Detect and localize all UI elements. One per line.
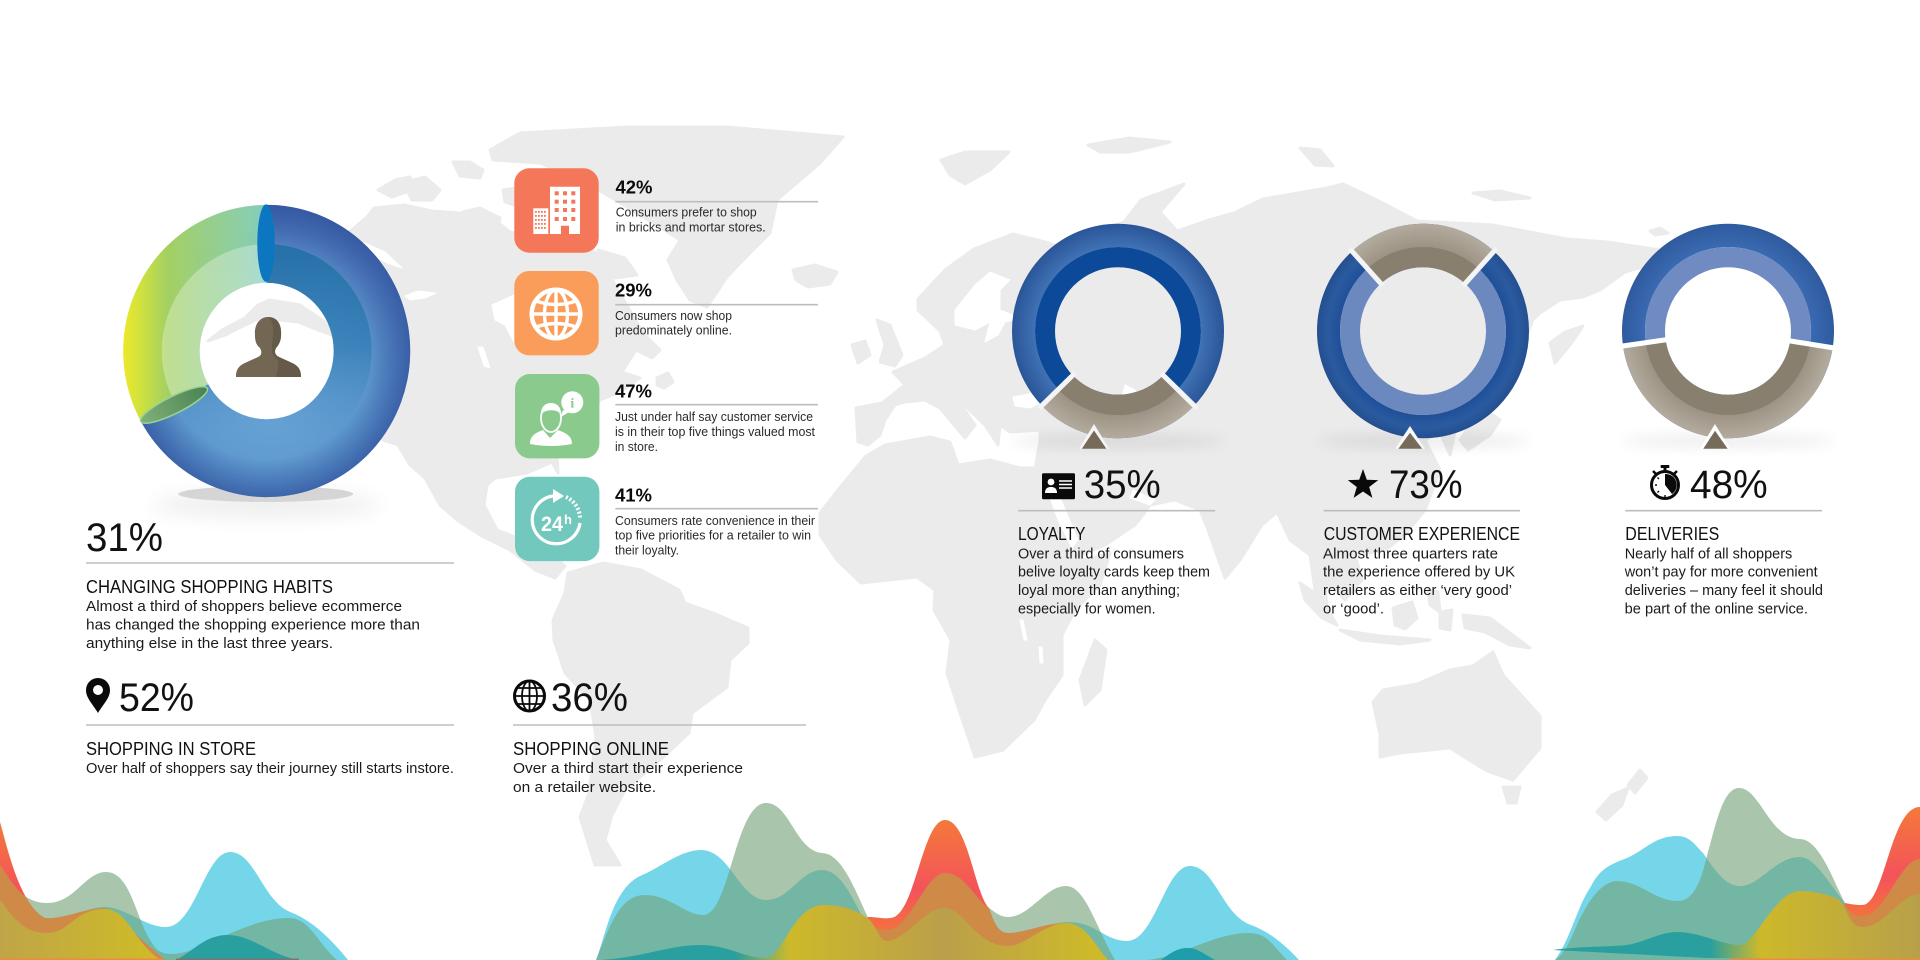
text: changing shopping habits: 31% xyxy=(86,516,163,560)
panel: stat 41 percent: their loyalty. xyxy=(615,543,679,557)
text: deliveries: Nearly half of all shoppers xyxy=(1625,546,1792,562)
panel: stat 47 percent: 47% xyxy=(615,381,652,402)
text: loyalty: 35% xyxy=(1084,463,1161,507)
text: changing shopping habits: Almost a third of shoppers believe ecommerce xyxy=(86,599,402,615)
text: loyalty: loyal more than anything; xyxy=(1018,583,1180,599)
icon: id card xyxy=(1042,473,1075,499)
area waves: bottom centre xyxy=(596,803,1299,960)
icon: person silhouette xyxy=(236,317,301,377)
text: customer experience xyxy=(1323,463,1520,617)
text: customer experience: 73% xyxy=(1389,463,1462,507)
panel: stat 41 percent: 41% xyxy=(615,485,652,506)
panel: stat 29 percent: 29% xyxy=(615,279,652,300)
panel: shopping in store xyxy=(86,676,454,777)
panel: stat 29 percent xyxy=(514,271,818,355)
big donut chart: 31 percent xyxy=(123,204,410,517)
icon: 24 hour clock tile: h xyxy=(564,512,572,527)
text: loyalty xyxy=(1018,463,1215,617)
text: deliveries: deliveries – many feel it should xyxy=(1625,583,1823,599)
panel: stat 47 percent xyxy=(515,374,818,458)
panel: stat 47 percent: Just under half say customer service xyxy=(615,410,813,424)
icon: stopwatch xyxy=(1652,465,1678,498)
icon: office buildings tile xyxy=(514,168,599,253)
donut chart: customer experience 73 percent xyxy=(1315,235,1531,449)
icon: advisor with info bubble tile xyxy=(515,374,599,458)
icon: wireframe globe xyxy=(514,681,544,711)
panel: shopping online xyxy=(513,676,806,796)
icon: advisor with info bubble tile: i xyxy=(570,396,574,412)
text: loyalty: belive loyalty cards keep them xyxy=(1018,565,1210,581)
panel: stat 41 percent: top five priorities for a retailer to win xyxy=(615,529,811,543)
panel: stat 42 percent: 42% xyxy=(616,176,652,197)
panel: shopping online: on a retailer website. xyxy=(513,780,656,796)
text: deliveries: DELIVERIES xyxy=(1625,524,1719,544)
text: deliveries xyxy=(1624,463,1823,617)
panel: shopping in store: SHOPPING IN STORE xyxy=(86,739,256,759)
text: deliveries: won’t pay for more convenient xyxy=(1624,565,1818,581)
area waves: bottom left xyxy=(0,822,348,960)
panel: stat 47 percent: in store. xyxy=(615,440,658,454)
panel: stat 41 percent: Consumers rate convenience in their xyxy=(615,514,815,528)
donut chart: loyalty 35 percent xyxy=(1010,235,1226,449)
panel: shopping online: Over a third start their experience xyxy=(513,761,743,777)
text: customer experience: Almost three quarters rate xyxy=(1323,546,1498,562)
text: customer experience: retailers as either ‘very good’ xyxy=(1323,583,1512,599)
text: loyalty: Over a third of consumers xyxy=(1018,546,1184,562)
panel: stat 29 percent: predominately online. xyxy=(615,324,732,338)
icon: 24 hour clock tile: 24 xyxy=(541,513,563,536)
text: loyalty: especially for women. xyxy=(1018,601,1156,617)
text: deliveries: 48% xyxy=(1690,463,1768,507)
panel: shopping online: 36% xyxy=(551,676,628,720)
panel: stat 41 percent xyxy=(515,477,818,561)
text: customer experience: or ‘good’. xyxy=(1323,601,1384,617)
icon: map pin xyxy=(86,678,110,713)
panel: shopping online: SHOPPING ONLINE xyxy=(513,739,669,759)
icon: star xyxy=(1348,469,1378,498)
text: deliveries: be part of the online service. xyxy=(1625,601,1808,617)
panel: stat 29 percent: Consumers now shop xyxy=(615,309,732,323)
panel: stat 42 percent xyxy=(514,168,818,253)
icon: globe tile xyxy=(514,271,599,355)
text: changing shopping habits: anything else in the last three years. xyxy=(86,636,333,652)
icon: 24 hour clock tile xyxy=(515,477,599,561)
panel: stat 42 percent: Consumers prefer to shop xyxy=(616,206,757,220)
panel: stat 42 percent: in bricks and mortar stores. xyxy=(616,220,766,234)
panel: shopping in store: Over half of shoppers say their journey still starts instore. xyxy=(86,761,454,777)
text: customer experience: the experience offered by UK xyxy=(1323,565,1515,581)
text: customer experience: CUSTOMER EXPERIENCE xyxy=(1324,524,1520,544)
text: changing shopping habits: has changed the shopping experience more than xyxy=(86,618,420,634)
panel: shopping in store: 52% xyxy=(119,676,194,720)
text: changing shopping habits: CHANGING SHOPPING HABITS xyxy=(86,577,333,597)
panel: stat 47 percent: is in their top five things valued most xyxy=(615,425,816,439)
area waves: bottom right xyxy=(1553,788,1920,960)
text: changing shopping habits xyxy=(86,516,454,652)
donut chart: deliveries 48 percent xyxy=(1619,235,1837,449)
world map background xyxy=(195,127,1668,865)
text: loyalty: LOYALTY xyxy=(1018,524,1085,544)
